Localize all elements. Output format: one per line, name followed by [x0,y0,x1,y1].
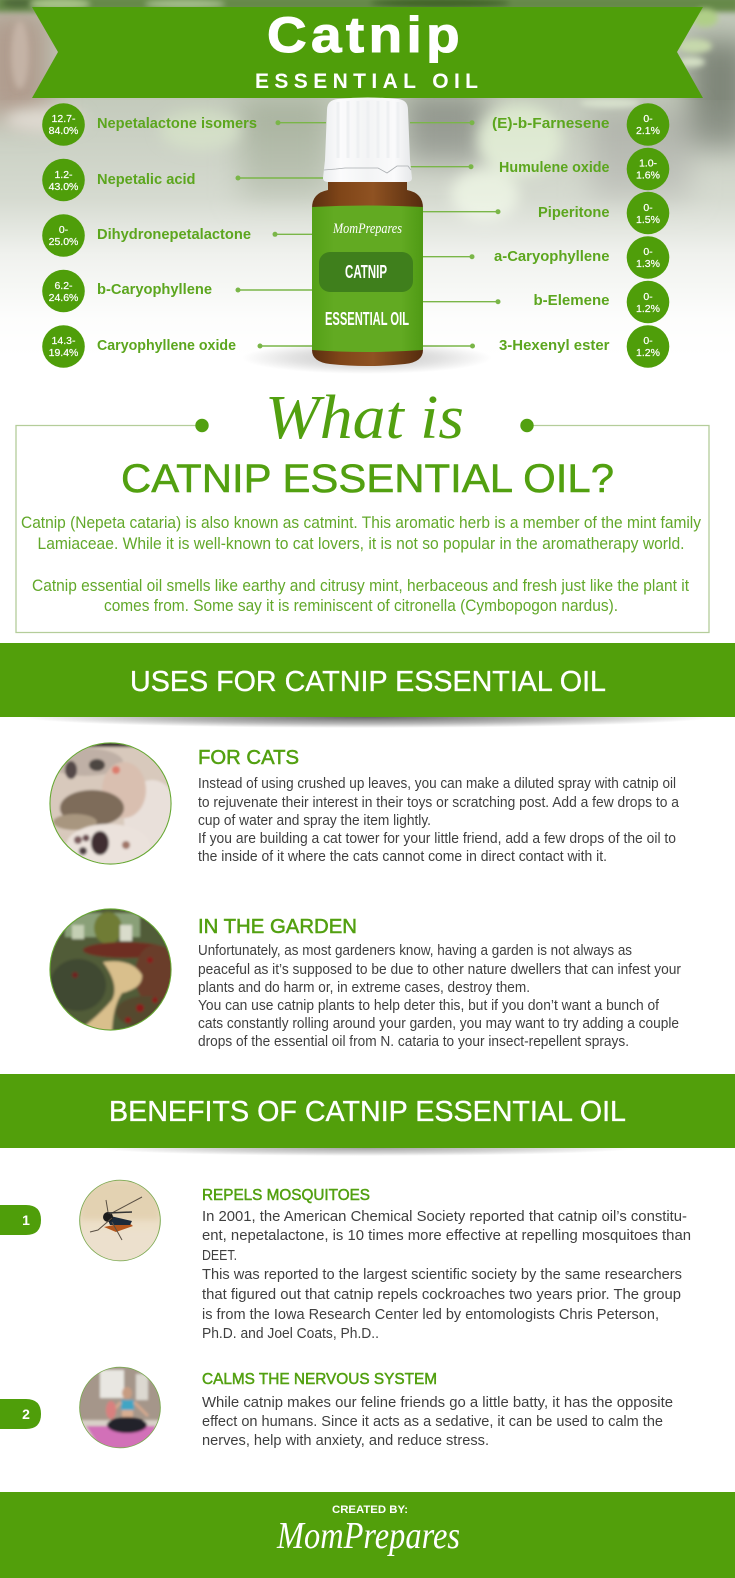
(E)-b-Farnesene [410,103,669,146]
Nepetalactone isomers: Nepetalactone isomers [97,116,257,132]
Nepetalactone isomers: 84.0% [49,125,78,137]
Nepetalic acid [42,159,326,201]
Dihydronepetalactone: 25.0% [49,236,78,248]
intro text: comes from. Some say it is reminiscent of citronella (Cymbopogon nardus). [104,597,618,615]
Caryophyllene oxide: 14.3- [52,335,76,347]
number tab 2: 2 [22,1406,30,1422]
text block: in the garden: plants and do harm or, in extreme cases, destroy them. [198,980,530,996]
text block: calms the nervous system: effect on humans. Since it acts as a sedative, it can be used to calm the [202,1413,663,1430]
right composition labels [410,103,669,368]
Caryophyllene oxide: 19.4% [49,347,78,359]
text block: in the garden: drops of the essential oil from N. cataria to your insect-repellent sprays. [198,1034,629,1050]
section bar: benefits [0,1074,735,1156]
bottle name plate [319,252,413,292]
(E)-b-Farnesene: 0- [643,113,653,125]
text block: calms the nervous system: nerves, help with anxiety, and reduce stress. [202,1432,489,1449]
text block: in the garden: You can use catnip plants to help deter this, but if you don’t want a bunch of [198,998,660,1014]
brand on bottle: MomPrepares [332,221,402,237]
bottle cap [323,98,412,182]
title: Catnip: Catnip [267,7,464,63]
b-Elemene: 1.2% [636,303,660,315]
text block: repels mosquitoes: Ph.D. and Joel Coats, Ph.D.. [202,1325,379,1342]
b-Elemene: 0- [643,291,653,303]
text block: for cats [198,747,680,865]
Humulene oxide: 1.0- [639,158,658,170]
Nepetalic acid: Nepetalic acid [97,172,196,188]
text block: repels mosquitoes: is from the Iowa Research Center led by entomologists Chris Peterson, [202,1306,659,1323]
text block: in the garden: peaceful as it’s supposed to be due to other nature dwellers that can infest your [198,962,681,978]
(E)-b-Farnesene: (E)-b-Farnesene [492,116,610,132]
photo: kitten [49,742,172,865]
bottle name plate: CATNIP [345,262,387,282]
Humulene oxide [410,148,669,190]
Dihydronepetalactone [42,214,313,257]
text block: in the garden: cats constantly rolling around your garden, you may want to try adding a couple [198,1016,679,1032]
Caryophyllene oxide: Caryophyllene oxide [97,338,236,354]
photo: yoga [80,1367,160,1448]
Dihydronepetalactone: Dihydronepetalactone [97,227,251,243]
a-Caryophyllene: a-Caryophyllene [494,249,610,265]
section bar: uses [0,643,735,728]
intro text [21,514,702,615]
Dihydronepetalactone: 0- [59,224,69,236]
3-Hexenyl ester: 3-Hexenyl ester [499,338,610,354]
section bar: benefits: BENEFITS OF CATNIP ESSENTIAL OIL [109,1096,626,1128]
a-Caryophyllene [422,236,669,279]
Nepetalic acid: 1.2- [54,169,73,181]
text block: for cats: the inside of it where the cats cannot come in direct contact with it. [198,849,607,865]
section bar: uses: USES FOR CATNIP ESSENTIAL OIL [130,666,606,698]
text block: in the garden [198,916,681,1050]
left composition labels [42,103,326,368]
intro text: Catnip (Nepeta cataria) is also known as catmint. This aromatic herb is a member of the mint family [21,514,702,532]
Nepetalactone isomers: 12.7- [52,113,76,125]
number tab 2 [0,1399,41,1429]
title banner [32,7,703,98]
(E)-b-Farnesene: 2.1% [636,125,660,137]
Piperitone: 0- [643,202,653,214]
Nepetalic acid: 43.0% [49,181,78,193]
text block: repels mosquitoes: DEET. [202,1247,237,1264]
text block: for cats: cup of water and spray the item lightly. [198,813,431,829]
text block: calms the nervous system: While catnip makes our feline friends go a little batty, it has the opposite [202,1394,673,1411]
text block: for cats: to rejuvenate their interest in their toys or scratching post. Add a few drops to a [198,795,680,811]
b-Elemene: b-Elemene [534,293,610,309]
3-Hexenyl ester: 0- [643,335,653,347]
heading: catnip essential oil: CATNIP ESSENTIAL OIL? [121,457,614,501]
bottle glass [312,180,423,366]
bottle label [312,206,423,352]
Caryophyllene oxide [42,325,313,368]
text block: for cats: FOR CATS [198,747,299,769]
created by: CREATED BY: [332,1504,408,1516]
photo: garden path [50,909,176,1035]
header background photo: catnip leaves [0,0,735,294]
Nepetalactone isomers [42,103,326,146]
text block: for cats: Instead of using crushed up leaves, you can make a diluted spray with catnip oil [198,776,676,792]
bottle shadow [242,342,492,374]
Piperitone: Piperitone [538,205,610,221]
b-Caryophyllene [42,270,313,312]
Piperitone: 1.5% [636,214,660,226]
text block: in the garden: IN THE GARDEN [198,916,357,938]
intro text: Lamiaceae. While it is well-known to cat lovers, it is not so popular in the aromatherapy world. [38,535,684,553]
photo: mosquito [80,1180,160,1262]
text block: repels mosquitoes: REPELS MOSQUITOES [202,1187,370,1204]
script heading: What is: What is [265,384,464,452]
subtitle: Essential Oil: ESSENTIAL OIL [255,70,478,93]
text block: in the garden: Unfortunately, as most gardeners know, having a garden is not always as [198,943,632,959]
number tab 1: 1 [22,1212,30,1228]
b-Caryophyllene: 24.6% [49,292,78,304]
b-Caryophyllene: 6.2- [54,280,73,292]
number tab 1 [0,1205,41,1235]
3-Hexenyl ester: 1.2% [636,347,660,359]
text block: repels mosquitoes: ent, nepetalactone, is 10 times more effective at repelling mosquitoes than [202,1227,691,1244]
b-Elemene [422,281,669,323]
Piperitone [422,192,669,234]
Humulene oxide: Humulene oxide [499,160,610,176]
text block: repels mosquitoes: In 2001, the American Chemical Society reported that catnip oil’s constitu- [202,1208,687,1225]
bottle essential oil text: ESSENTIAL OIL [325,309,409,329]
brand: MomPrepares: MomPrepares [276,1515,460,1557]
b-Caryophyllene: b-Caryophyllene [97,282,212,298]
bottle illustration [312,98,423,366]
3-Hexenyl ester [422,325,669,368]
text block: repels mosquitoes: This was reported to the largest scientific society by the same researchers [202,1266,682,1283]
intro text: Catnip essential oil smells like earthy and citrusy mint, herbaceous and fresh just like the plant it [32,577,689,595]
text block: repels mosquitoes [202,1187,691,1342]
text block: for cats: If you are building a cat tower for your little friend, add a few drops of the oil to [198,831,676,847]
Humulene oxide: 1.6% [636,170,660,182]
text block: calms the nervous system: CALMS THE NERVOUS SYSTEM [202,1371,437,1388]
text block: repels mosquitoes: that figured out that catnip repels cockroaches two years prior. The group [202,1286,681,1303]
a-Caryophyllene: 1.3% [636,258,660,270]
text block: calms the nervous system [202,1371,673,1449]
panel: what is catnip essential oil [16,384,709,632]
a-Caryophyllene: 0- [643,246,653,258]
footer [0,1492,735,1578]
